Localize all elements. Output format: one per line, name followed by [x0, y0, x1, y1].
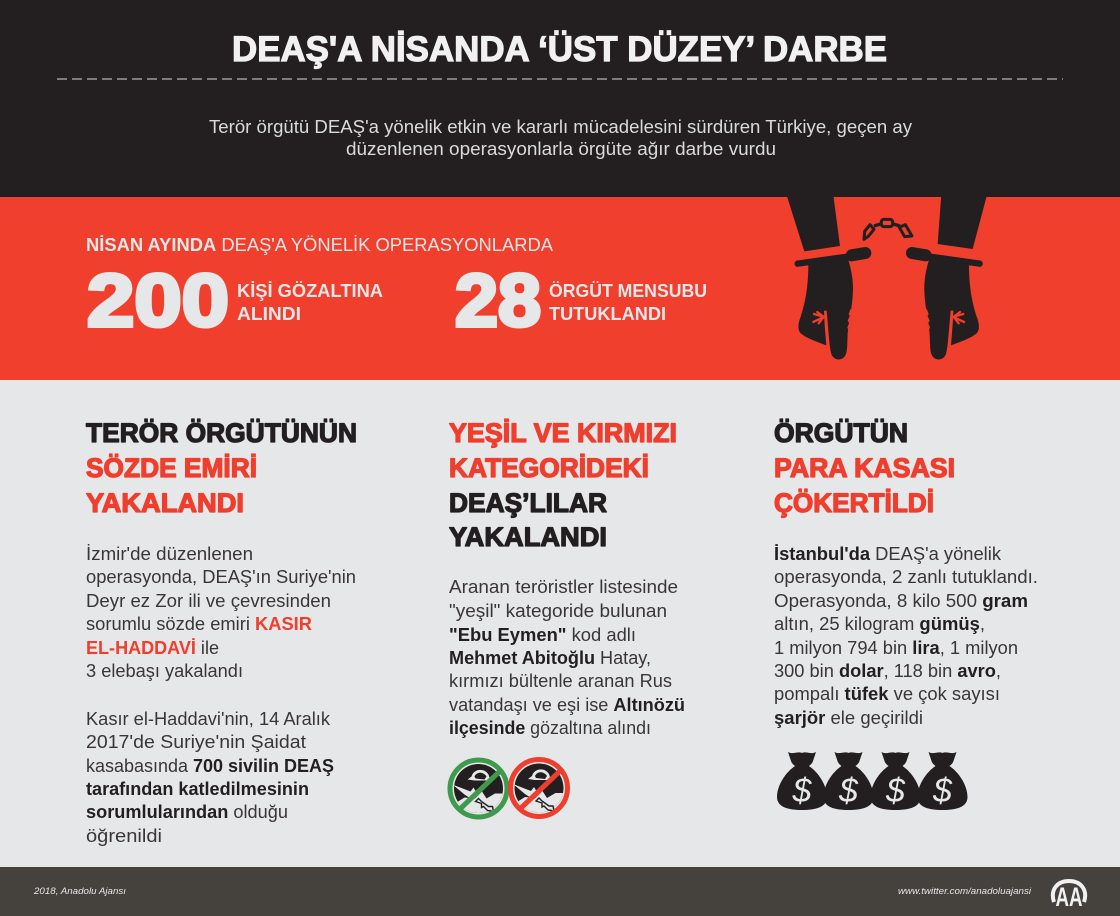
text block: column 2 paragraph: Aranan teröristler listesinde: [449, 577, 678, 597]
stat: 200 detained: 200: [87, 259, 229, 342]
text block: column 3 paragraph: [774, 544, 1038, 728]
text block: column 1 first paragraph: Deyr ez Zor ili ve çevresinden: [86, 591, 331, 611]
panel: column 2 wanted list: [448, 418, 685, 818]
title: DEAŞ'A NİSANDA ‘ÜST DÜZEY’ DARBE: [232, 30, 887, 69]
text block: column 3 paragraph: altın, 25 kilogram gümüş,: [774, 614, 985, 634]
heading: column 3: [774, 418, 955, 518]
panel: column 1 emir captured: [86, 418, 357, 846]
heading: column 3: ÖRGÜTÜN: [774, 418, 908, 448]
text block: column 3 paragraph: Operasyonda, 8 kilo 500 gram: [774, 591, 1028, 611]
heading: column 1: TERÖR ÖRGÜTÜNÜN: [86, 418, 357, 448]
text block: column 2 paragraph: [449, 577, 685, 738]
heading: column 2: DEAŞ’LILAR: [449, 488, 607, 518]
heading: column 1: SÖZDE EMİRİ: [86, 453, 257, 483]
text block: column 1 second paragraph: [86, 709, 334, 846]
intro text: [209, 117, 912, 159]
panel: footer: [0, 867, 1120, 916]
panel: header: [0, 0, 1120, 197]
text block: column 1 first paragraph: [86, 544, 356, 681]
text block: column 1 first paragraph: operasyonda, DEAŞ'ın Suriye'nin: [86, 567, 356, 587]
text block: column 3 paragraph: operasyonda, 2 zanlı tutuklandı.: [774, 567, 1038, 587]
footer link: www.twitter.com/anadoluajansi: [898, 886, 1032, 897]
stats heading: NİSAN AYINDA DEAŞ'A YÖNELİK OPERASYONLARDA: [86, 235, 553, 255]
panel: red statistics band: [0, 190, 1120, 380]
icon: four money bags: [777, 752, 968, 810]
stat: 28 arrested: TUTUKLANDI: [549, 303, 666, 324]
heading: column 3: ÇÖKERTİLDİ: [774, 488, 934, 518]
stat: 28 arrested: 28: [455, 259, 541, 342]
icon: handcuffed hands with broken chain: [785, 190, 988, 359]
text block: column 3 paragraph: 300 bin dolar, 118 bin avro,: [774, 661, 1001, 681]
icon: Anadolu Agency logo: [1053, 881, 1085, 912]
text block: column 1 second paragraph: 2017'de Suriye'nin Şaidat: [86, 732, 306, 752]
panel: column 3 money seized: [774, 418, 1038, 810]
text block: column 2 paragraph: vatandaşı ve eşi ise Altınözü: [449, 695, 685, 715]
text block: column 2 paragraph: ilçesinde gözaltına alındı: [449, 718, 651, 738]
text block: column 1 second paragraph: kasabasında 700 sivilin DEAŞ: [86, 756, 334, 776]
intro text: Terör örgütü DEAŞ'a yönelik etkin ve kararlı mücadelesini sürdüren Türkiye, geçen ay: [209, 117, 912, 137]
text block: column 2 paragraph: "Ebu Eymen" kod adlı: [449, 625, 636, 645]
stat: 28 arrested: [455, 259, 707, 342]
text block: column 1 first paragraph: EL-HADDAVİ ile: [86, 638, 219, 658]
text block: column 2 paragraph: kırmızı bültenle aranan Rus: [449, 671, 672, 691]
heading: column 2: [449, 418, 677, 552]
heading: column 2: YEŞİL VE KIRMIZI: [449, 418, 677, 448]
text block: column 1 first paragraph: 3 elebaşı yakalandı: [86, 661, 243, 681]
footer credit: 2018, Anadolu Ajansı: [33, 886, 126, 897]
heading: column 1: YAKALANDI: [86, 488, 244, 518]
text block: column 1 second paragraph: öğrenildi: [86, 826, 162, 846]
icon: red category crossed-out militant: [509, 760, 569, 818]
text block: column 3 paragraph: pompalı tüfek ve çok sayısı: [774, 684, 1000, 704]
stat: 200 detained: KİŞİ GÖZALTINA: [237, 280, 383, 301]
icon: Anadolu Agency logo: AA: [1056, 882, 1082, 912]
heading: column 2: YAKALANDI: [449, 522, 607, 552]
heading: column 1: [86, 418, 357, 518]
text block: column 3 paragraph: İstanbul'da DEAŞ'a yönelik: [774, 544, 1002, 564]
text block: column 1 second paragraph: sorumlularından olduğu: [86, 802, 288, 822]
heading: column 2: KATEGORİDEKİ: [449, 453, 649, 483]
heading: column 3: PARA KASASI: [774, 453, 955, 483]
stat: 28 arrested: ÖRGÜT MENSUBU: [549, 280, 707, 301]
text block: column 2 paragraph: Mehmet Abitoğlu Hatay,: [449, 648, 651, 668]
text block: column 3 paragraph: 1 milyon 794 bin lira, 1 milyon: [774, 638, 1018, 658]
text block: column 1 second paragraph: Kasır el-Haddavi'nin, 14 Aralık: [86, 709, 331, 729]
icon: green category crossed-out militant: [448, 760, 508, 818]
intro text: düzenlenen operasyonlarla örgüte ağır darbe vurdu: [346, 139, 776, 159]
text block: column 1 first paragraph: İzmir'de düzenlenen: [86, 544, 253, 564]
text block: column 2 paragraph: "yeşil" kategoride bulunan: [449, 601, 667, 621]
text block: column 3 paragraph: şarjör ele geçirildi: [774, 708, 923, 728]
stat: 200 detained: [87, 259, 383, 342]
text block: column 1 first paragraph: sorumlu sözde emiri KASIR: [86, 614, 312, 634]
stat: 200 detained: ALINDI: [237, 303, 301, 324]
text block: column 1 second paragraph: tarafından katledilmesinin: [86, 779, 309, 799]
